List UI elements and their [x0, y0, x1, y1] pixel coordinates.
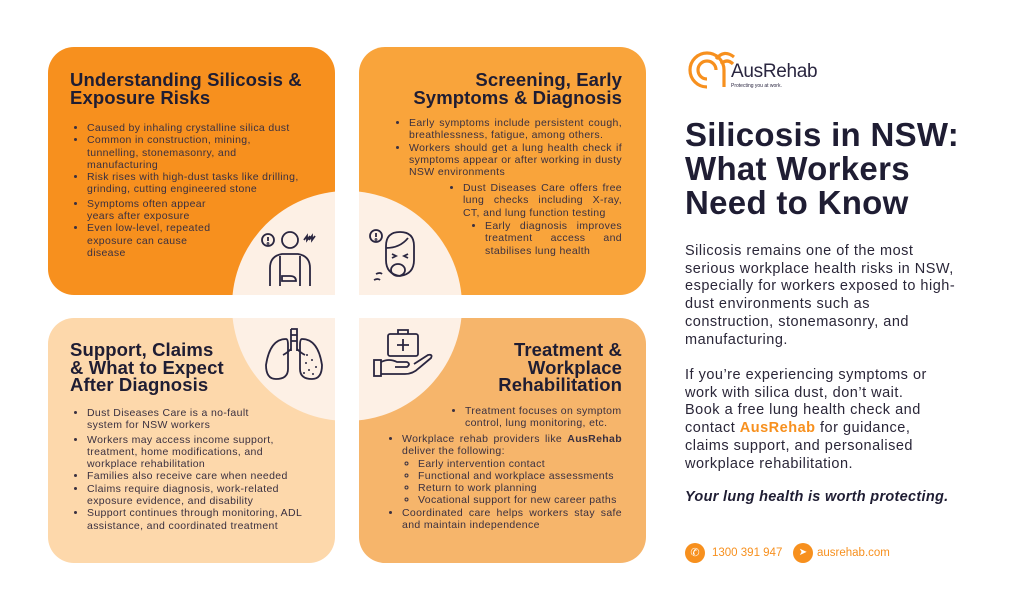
bullets: screening [396, 117, 622, 178]
call to action paragraph: claims support, and personalised [685, 438, 913, 454]
heading: support [70, 339, 224, 395]
text: Early diagnosis improves treatment access and stabilises lung health [485, 220, 622, 257]
contact: phone [685, 543, 782, 563]
heading: treatment: Treatment & [514, 339, 622, 360]
call to action paragraph: work with silica dust, don’t wait. [685, 385, 903, 401]
intro paragraph [685, 243, 955, 348]
bullets: understanding: Risk rises with high-dust tasks like drilling, [87, 171, 299, 183]
main title: Need to Know [685, 184, 909, 221]
text: Functional and workplace assessments [418, 470, 614, 482]
call to action paragraph: Book a free lung health check and [685, 402, 921, 418]
heading: understanding: Exposure Risks [70, 86, 210, 108]
bullets: understanding: disease [87, 247, 126, 259]
logo: AusRehab [731, 61, 817, 82]
text: Dust Diseases Care offers free lung checks including X-ray, CT, and lung function testing [463, 182, 622, 219]
panel: screening [359, 47, 646, 295]
bullets: understanding: Caused by inhaling crystalline silica dust [87, 122, 290, 134]
logo: Protecting you at work. [731, 83, 782, 89]
heading: understanding: Understanding Silicosis & [70, 69, 302, 90]
intro paragraph: dust environments such as [685, 296, 870, 312]
bullets: understanding: manufacturing [87, 159, 158, 171]
bullets: understanding: years after exposure [87, 210, 190, 222]
contact: phone: 1300 391 947 [712, 547, 782, 559]
panel: treatment [359, 318, 646, 563]
bullets: support: Families also receive care when needed [87, 470, 288, 482]
bullets: support: exposure evidence, and disability [87, 495, 253, 507]
intro paragraph: especially for workers exposed to high- [685, 278, 955, 294]
text: Coordinated care helps workers stay safe and maintain independence [402, 507, 622, 531]
bullets: treatment [452, 405, 621, 429]
contact: website: ausrehab.com [817, 547, 890, 559]
bullets: support: Support continues through monitoring, ADL [87, 507, 302, 519]
icon: hand with first aid kit [373, 329, 432, 377]
bullets: support: assistance, and coordinated treatment [87, 520, 278, 532]
bullets: support: workplace rehabilitation [87, 458, 205, 470]
bullets: understanding: Common in construction, mining, [87, 134, 251, 146]
text: Early intervention contact [418, 458, 545, 470]
white gaps [335, 40, 359, 570]
contact: website: ➤ [799, 547, 807, 558]
heading: treatment: Workplace [528, 356, 622, 378]
heading: understanding [70, 69, 302, 108]
panel: support claims [48, 318, 335, 563]
panel: understanding silicosis [48, 47, 335, 295]
icon: worker with chest pain [261, 231, 316, 286]
bullets: screening: Workers should get a lung health check if symptoms appear or after working in dusty NSW environments [409, 142, 622, 178]
call to action paragraph: If you’re experiencing symptoms or [685, 367, 927, 383]
text: Return to work planning [418, 482, 537, 494]
logo [688, 51, 817, 89]
heading: support: Support, Claims [70, 339, 213, 360]
intro paragraph: serious workplace health risks in NSW, [685, 261, 954, 277]
intro paragraph: construction, stonemasonry, and [685, 314, 909, 330]
bullets: treatment: Treatment focuses on symptom [465, 405, 621, 417]
bullets: support: Workers may access income support, [87, 434, 274, 446]
bullets: support: Claims require diagnosis, work-related [87, 483, 279, 495]
heading: treatment [498, 339, 622, 395]
bullets: understanding: Even low-level, repeated [87, 222, 210, 234]
bullets: understanding: exposure can cause [87, 235, 187, 247]
bullets: support: Dust Diseases Care is a no-fault [87, 407, 249, 419]
bullets: understanding: grinding, cutting engineered stone [87, 183, 257, 195]
call to action paragraph: contact AusRehab for guidance, [685, 420, 910, 436]
text: Workplace rehab providers like AusRehab deliver the following: [402, 433, 622, 457]
bullets: understanding: tunnelling, stonemasonry, and [87, 147, 236, 159]
call to action paragraph [685, 367, 927, 472]
intro paragraph: Silicosis remains one of the most [685, 243, 913, 259]
contact: phone: ✆ [690, 547, 700, 559]
bullets: understanding: Symptoms often appear [87, 198, 206, 210]
central circle [232, 191, 462, 421]
heading: screening: Symptoms & Diagnosis [413, 86, 622, 108]
contact: website [793, 543, 890, 563]
heading: treatment: Rehabilitation [498, 374, 622, 395]
main title: What Workers [685, 150, 910, 187]
heading: screening: Screening, Early [475, 69, 622, 90]
icon: coughing person [369, 229, 415, 281]
tagline: Your lung health is worth protecting. [685, 489, 949, 505]
intro paragraph: manufacturing. [685, 332, 788, 348]
heading: support: After Diagnosis [70, 374, 208, 395]
text: Vocational support for new career paths [418, 494, 617, 506]
call to action paragraph: workplace rehabilitation. [685, 456, 853, 472]
bullets: support [74, 407, 302, 532]
main title: Silicosis in NSW: [685, 116, 959, 153]
heading: support: & What to Expect [70, 356, 224, 378]
bullets: support: treatment, home modifications, and [87, 446, 263, 458]
bullets: understanding [74, 122, 299, 259]
icon: lungs [265, 328, 323, 380]
bullets: screening: Early symptoms include persistent cough, breathlessness, fatigue, among others. [409, 117, 622, 141]
main title [685, 116, 959, 221]
heading: screening [413, 69, 622, 108]
bullets: support: system for NSW workers [87, 419, 210, 431]
bullets: treatment: control, lung monitoring, etc. [465, 417, 607, 429]
